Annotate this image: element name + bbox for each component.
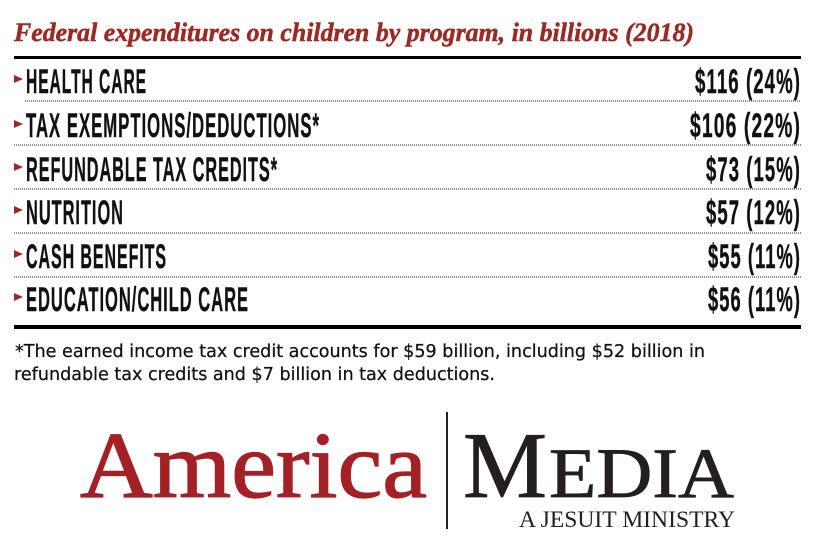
logo word: America: America <box>80 414 427 518</box>
footnote <box>14 341 705 385</box>
row: refundable tax credits <box>14 151 801 189</box>
logo tagline: A JESUIT MINISTRY <box>519 507 735 532</box>
row: health care <box>14 63 801 101</box>
top rule <box>14 56 801 59</box>
table of programs <box>14 63 801 319</box>
row: nutrition: NUTRITION <box>26 194 124 232</box>
row: tax exemptions: TAX EXEMPTIONS/DEDUCTIONS* <box>26 107 320 145</box>
logo: America Media <box>80 412 735 532</box>
row: health care: HEALTH CARE <box>26 63 147 101</box>
row: cash benefits: CASH BENEFITS <box>26 238 167 276</box>
footnote: refundable tax credits and $7 billion in tax deductions. <box>14 364 495 385</box>
row: cash benefits <box>14 238 801 276</box>
row: nutrition <box>14 194 801 232</box>
bottom rule <box>14 325 801 329</box>
logo divider <box>446 412 448 529</box>
title: Federal expenditures on children by program, in billions (2018) <box>13 18 694 47</box>
row: refundable tax credits: REFUNDABLE TAX CREDITS* <box>26 151 278 189</box>
footnote: *The earned income tax credit accounts for $59 billion, including $52 billion in <box>15 341 705 362</box>
row: education: EDUCATION/CHILD CARE <box>26 281 249 319</box>
logo word: Media: M <box>463 414 547 518</box>
row: education <box>14 281 801 319</box>
logo word: Media: EDIA <box>549 435 734 513</box>
